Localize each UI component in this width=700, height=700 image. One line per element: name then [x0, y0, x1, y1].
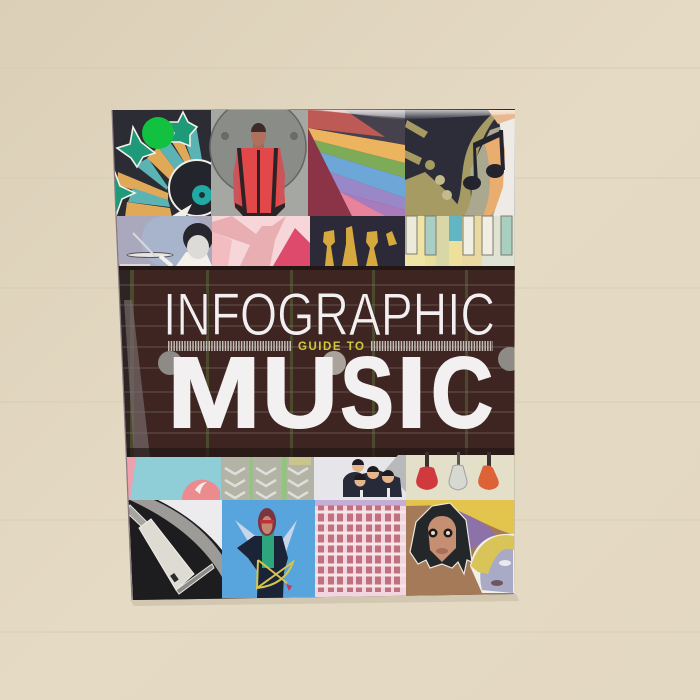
title: MUSIC: S	[340, 338, 394, 449]
title: MUSIC: C	[431, 337, 493, 448]
panel: piano keys	[405, 216, 515, 266]
panel: vinyl record and stars	[114, 110, 211, 216]
title: MUSIC: I	[397, 336, 426, 448]
shrink-wrap glare	[320, 110, 515, 120]
sticker: green dot	[142, 117, 174, 149]
title: MUSIC: M	[167, 338, 261, 449]
panel: figure with wings and bow	[222, 500, 315, 598]
panel: band in gold on dark	[310, 216, 405, 266]
spine shine	[124, 300, 150, 457]
panel: teal with pink circle	[125, 457, 221, 501]
panel: dark guitar neck title band	[105, 266, 525, 457]
panel: grey chevrons with green stripes	[221, 457, 314, 501]
title: INFOGRAPHIC: INFOGRAPHIC	[163, 281, 495, 348]
icon: blonde face	[470, 534, 515, 593]
divider: left tick bar	[168, 341, 292, 351]
panel: guitar and music note	[405, 110, 515, 216]
panel: pink silhouette	[212, 216, 310, 266]
book cover	[105, 99, 525, 605]
panel: three guitars	[406, 452, 515, 501]
panel: pink check pattern	[315, 500, 406, 597]
book shadow	[130, 594, 519, 606]
panel: rock faces	[406, 500, 515, 596]
panel: rainbow prism	[308, 110, 405, 216]
panel: band in suits	[314, 455, 406, 501]
fret markers	[158, 351, 182, 375]
title: MUSIC: U	[262, 336, 338, 448]
panel: red jacket figure	[210, 99, 308, 216]
spine edge highlight	[112, 110, 132, 600]
title: MUSIC	[174, 356, 492, 429]
divider: right tick bar	[371, 341, 493, 351]
icon: vinyl record	[168, 159, 211, 216]
icon: tonearm	[126, 505, 214, 594]
icon: music notes	[463, 130, 505, 190]
subtitle: GUIDE TO: GUIDE TO	[298, 341, 364, 353]
icon: stars	[112, 112, 197, 216]
panel: drummer	[114, 216, 213, 266]
panel: turntable	[126, 500, 222, 600]
icon: face with long dark hair	[410, 503, 472, 574]
